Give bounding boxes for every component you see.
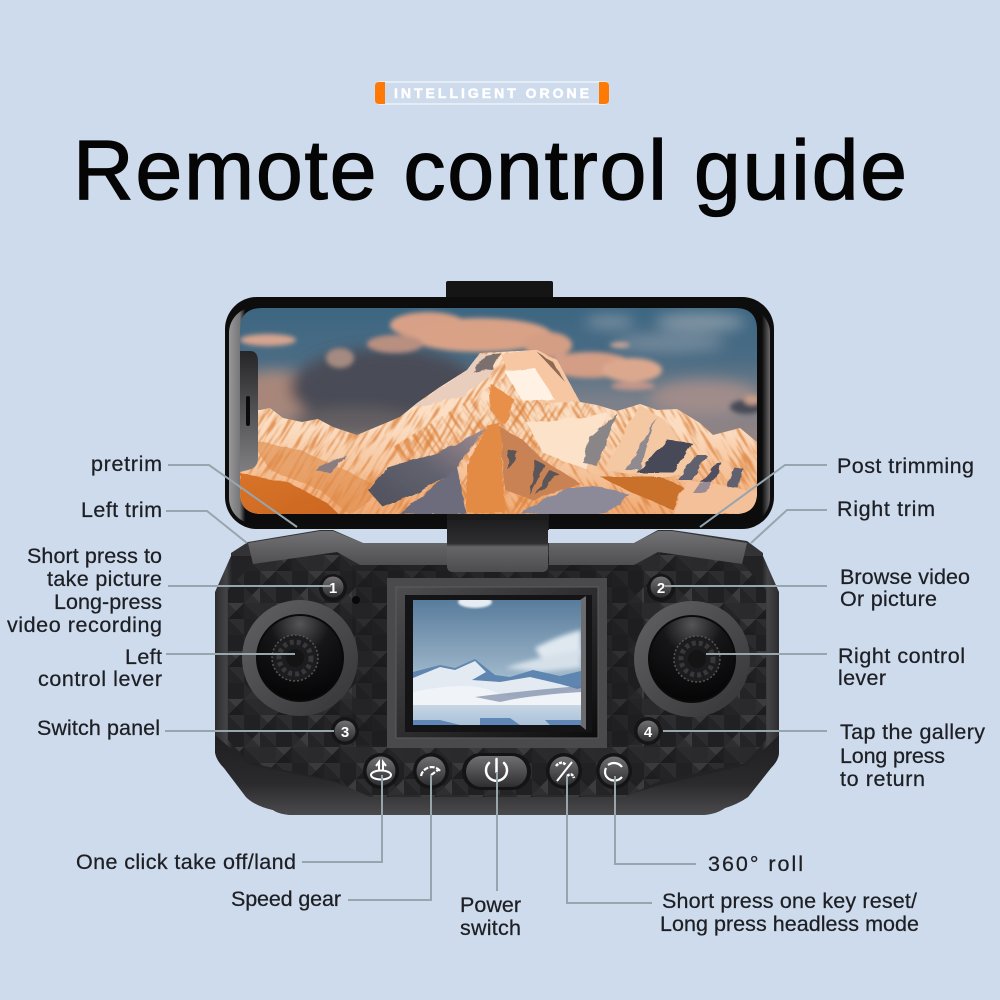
label: tap the gallery: Long press: [840, 744, 945, 768]
number button 2: [647, 574, 675, 602]
label: speed gear: Speed gear: [231, 887, 341, 911]
number button 4: 4: [644, 724, 653, 741]
number button 3: [331, 717, 359, 745]
leader lines: [165, 465, 827, 903]
controller body: [215, 556, 779, 815]
label: left control lever: Left: [125, 645, 162, 669]
center hinge: [447, 520, 548, 572]
left bumper: [248, 531, 447, 565]
display photo: snow mountains: [413, 596, 581, 725]
number button 2: 2: [657, 580, 665, 597]
label: button 1 description: video recording: [7, 613, 162, 637]
mountains: [240, 350, 757, 514]
button: speed gear: [413, 753, 449, 789]
controller: [215, 520, 779, 815]
right joystick: [634, 601, 750, 717]
carbon texture panel: [228, 552, 766, 797]
label: one key reset: [660, 889, 919, 936]
label: browse video: Browse video: [840, 565, 970, 589]
title: Remote control guide: [73, 123, 907, 217]
right bumper: [549, 531, 747, 565]
phone body: [225, 297, 774, 529]
button: power: [462, 753, 531, 790]
label: button 1 description: Long-press: [54, 590, 162, 614]
button: one key reset: [546, 753, 582, 789]
label: power switch: switch: [460, 916, 521, 940]
label: right control lever: [838, 644, 965, 690]
phone screen: mountain photo: [240, 308, 757, 514]
label: browse video: [840, 565, 970, 611]
number button 3: 3: [341, 724, 349, 741]
center dark zone around display: [352, 565, 642, 745]
label: button 1 description: [7, 544, 162, 637]
button: one click take off: [363, 753, 399, 789]
phone: [225, 281, 774, 530]
label: right control lever: lever: [838, 666, 886, 690]
label: 360 roll: 360° roll: [708, 852, 803, 876]
badge: intelligent drone: [375, 82, 609, 104]
number button 1: 1: [329, 580, 337, 597]
label: switch panel: Switch panel: [37, 716, 160, 740]
bottom grip: [215, 735, 779, 815]
phone top clamp: [446, 281, 553, 309]
label: one key reset: Long press headless mode: [660, 912, 919, 936]
label: tap the gallery: [840, 720, 985, 791]
labels: bottom row: [76, 850, 919, 940]
controller shoulders: [231, 530, 763, 575]
button: 360 roll: [596, 753, 632, 789]
number button 4: [634, 717, 662, 745]
label: one key reset: Short press one key reset/: [662, 889, 917, 913]
label: browse video: Or picture: [840, 587, 937, 611]
number button 1: [319, 574, 347, 602]
label: tap the gallery: to return: [840, 767, 925, 791]
label: tap the gallery: Tap the gallery: [840, 720, 985, 744]
label: right control lever: Right control: [838, 644, 965, 668]
label: left control lever: control lever: [38, 667, 162, 691]
label: pretrim: pretrim: [91, 452, 162, 476]
label: left control lever: [38, 645, 162, 691]
left joystick: [242, 600, 358, 716]
label: power switch: Power: [460, 893, 521, 917]
label: button 1 description: Short press to: [27, 544, 162, 568]
label: left trim: Left trim: [81, 498, 162, 522]
phone notch: [240, 351, 258, 472]
label: button 1 description: take picture: [47, 567, 162, 591]
label: power switch: [460, 893, 521, 940]
label: post trimming: Post trimming: [837, 454, 974, 478]
phone bottom clamp: [447, 514, 549, 530]
label: one click take off: One click take off/land: [76, 850, 296, 874]
display screen frame: [387, 578, 607, 748]
labels: right column: [837, 454, 985, 791]
labels: left column: [7, 452, 162, 740]
badge: intelligent drone: INTELLIGENT ORONE: [394, 85, 589, 101]
indicator hole: [352, 596, 360, 604]
label: right trim: Right trim: [837, 497, 935, 521]
